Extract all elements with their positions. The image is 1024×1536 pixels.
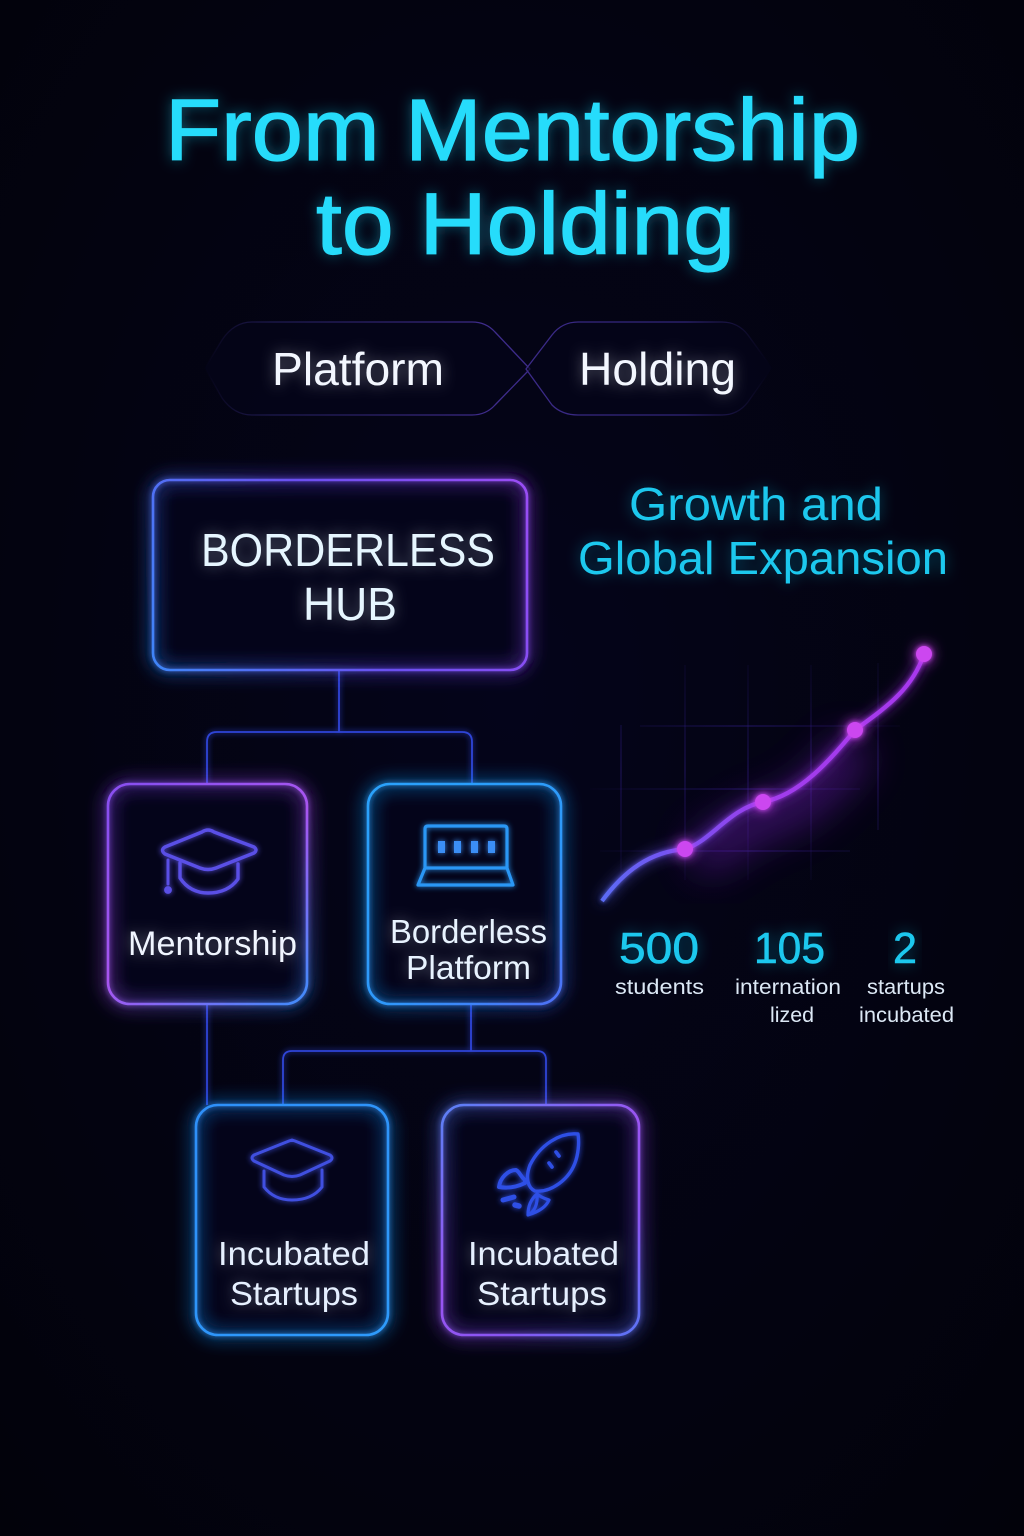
stat: 2 startups incubated: incubated — [859, 1004, 954, 1027]
incubated startups label: Startups — [477, 1275, 607, 1312]
incubated startups label — [468, 1235, 619, 1312]
data points — [677, 646, 932, 857]
progress chevrons: platform to holding — [205, 322, 772, 415]
panel: borderless hub — [153, 480, 527, 670]
incubated startups label — [218, 1235, 370, 1312]
borderless platform label — [390, 913, 547, 986]
stat: 105 internationalized — [735, 924, 841, 1027]
stat: 2 startups incubated: 2 — [893, 924, 917, 973]
hub label — [201, 524, 495, 630]
chevron: platform: Platform — [272, 343, 444, 395]
incubated startups label: Incubated — [468, 1235, 619, 1272]
title — [165, 82, 860, 273]
incubated startups label: Startups — [230, 1275, 358, 1312]
mentorship label: Mentorship — [128, 925, 297, 963]
hub label: HUB — [303, 578, 397, 630]
borderless platform label: Borderless — [390, 913, 547, 950]
hub label: BORDERLESS — [201, 524, 495, 576]
growth heading: Global Expansion — [578, 532, 948, 584]
stat: 105 internationalized: internation — [735, 976, 841, 999]
title: to Holding — [316, 176, 735, 273]
panel: incubated startups right — [442, 1105, 639, 1335]
stat: 2 startups incubated — [859, 924, 954, 1027]
growth line chart — [590, 646, 932, 901]
stat: 105 internationalized: lized — [770, 1004, 814, 1027]
stat: 500 students — [615, 924, 704, 999]
stat: 105 internationalized: 105 — [754, 924, 825, 973]
growth heading: Growth and — [629, 478, 883, 530]
chevron: holding — [526, 322, 772, 415]
panel: borderless platform — [368, 784, 561, 1004]
icon: graduation cap — [252, 1140, 332, 1200]
borderless platform label: Platform — [406, 949, 531, 986]
panel: mentorship — [108, 784, 307, 1004]
stat: 2 startups incubated: startups — [867, 976, 945, 999]
title: From Mentorship — [165, 82, 860, 179]
icon: graduation cap — [162, 830, 256, 893]
chevron: holding: Holding — [579, 343, 736, 395]
stat: 500 students: students — [615, 976, 704, 999]
incubated startups label: Incubated — [218, 1235, 370, 1272]
trend curve — [602, 654, 924, 901]
icon: laptop — [418, 826, 513, 885]
panel: incubated startups left — [196, 1105, 388, 1335]
icon: rocket — [499, 1134, 579, 1215]
connector lines — [207, 670, 546, 1105]
growth heading — [578, 478, 948, 584]
chevron: platform — [205, 322, 530, 415]
stat: 500 students: 500 — [619, 924, 699, 973]
